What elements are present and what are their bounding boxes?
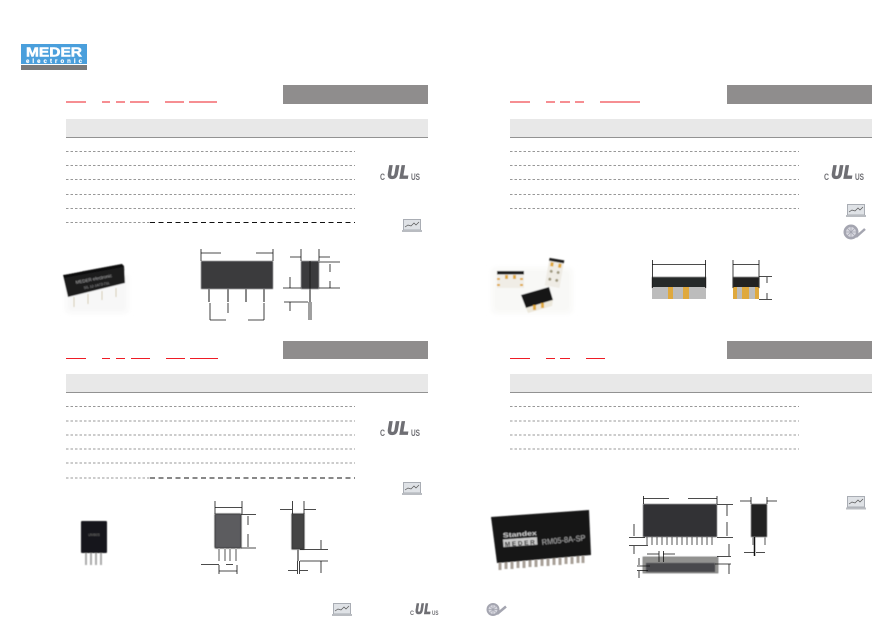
product photo (81, 521, 107, 565)
panel: top-right product (492, 85, 872, 313)
table rows (66, 152, 355, 222)
legend: bottom icons (332, 602, 506, 618)
technical drawing: front view (652, 260, 706, 299)
technical drawing: front view (629, 496, 733, 554)
product photo: Standex RM05-8A-SP: RM05-8A-SP (541, 533, 586, 547)
header tab (727, 341, 872, 359)
technical drawing: side view (280, 501, 328, 574)
icon: UL certification (824, 162, 864, 184)
icon: UL certification: UL (387, 418, 409, 440)
logo: MEDER electronic: MEDER (26, 44, 83, 60)
product photo: UMB05 (88, 533, 100, 537)
table header (510, 374, 872, 393)
icon: UL certification: C (824, 172, 829, 182)
icon: UL certification: UL (415, 602, 431, 618)
technical drawing: bottom view (637, 544, 731, 578)
logo: MEDER electronic: electronic (26, 59, 83, 65)
panel: bottom-right product (491, 341, 872, 578)
header tab (283, 341, 428, 359)
table rows (66, 406, 355, 478)
icon: chart laptop (402, 482, 422, 495)
product photo: Standex RM05-8A-SP: MEDER (505, 539, 535, 548)
technical drawing: front view (201, 501, 256, 574)
icon: UL certification: US (855, 172, 864, 182)
panel: bottom-left product (66, 341, 428, 574)
product photo: Standex RM05-8A-SP (491, 510, 591, 570)
table header (66, 119, 428, 138)
icon: UL certification: UL (387, 162, 409, 184)
table rows (510, 406, 799, 449)
icon: chart laptop (846, 204, 866, 217)
product photo: Standex RM05-8A-SP: Standex (503, 530, 538, 539)
panel: top-left product (63, 85, 428, 320)
product photo: SIL 12-1A72-71L (83, 281, 110, 290)
icon: tape reel (486, 603, 506, 616)
technical drawing: side view (283, 249, 340, 320)
header tab (727, 85, 872, 104)
icon: UL certification: C (380, 428, 385, 438)
product photo (63, 264, 128, 313)
header tab (283, 85, 428, 104)
icon: UL certification: US (411, 428, 420, 438)
red title underlines (510, 101, 640, 103)
logo: MEDER electronic (21, 44, 87, 70)
icon: UL certification (380, 418, 420, 440)
icon: tape reel (844, 224, 865, 240)
red title underlines (66, 358, 218, 360)
icon: chart laptop (846, 496, 866, 510)
icon: UL certification: US (411, 172, 420, 182)
icon: UL certification (380, 162, 420, 184)
product photo: MEDER electronic (75, 273, 113, 285)
red title underlines (510, 358, 605, 360)
technical drawing: side view (733, 260, 772, 300)
table rows (510, 152, 799, 208)
table header (66, 374, 428, 393)
icon: UL certification: C (410, 611, 415, 617)
icon: UL certification: C (380, 172, 385, 182)
icon: UL certification: UL (831, 162, 853, 184)
icon: chart laptop (332, 603, 352, 616)
icon: UL certification: US (432, 611, 438, 617)
technical drawing: front view (201, 249, 273, 320)
product photo: three SMD chips (492, 258, 572, 313)
red title underlines (66, 101, 217, 103)
technical drawing: side view (740, 497, 777, 556)
table header (510, 119, 872, 138)
icon: chart laptop (402, 219, 422, 232)
